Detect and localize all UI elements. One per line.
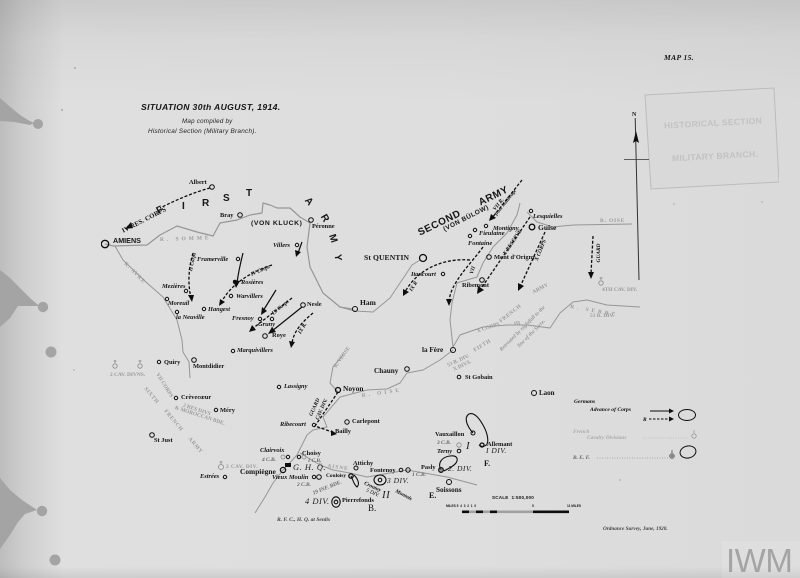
Sixth French Army labels: & MOROCCAN BDE. <box>174 405 226 427</box>
towns: First Army sector: la Neuville <box>176 314 205 321</box>
river names: R. SOMME <box>160 235 212 243</box>
towns: First Army sector: Rosières <box>240 279 264 286</box>
towns: First Army sector <box>101 179 335 480</box>
Fifth French Army labels: 53 R. DIV. <box>446 353 471 369</box>
river names: R. AVRE <box>123 261 147 285</box>
Sixth French Army labels: VII CORPS <box>154 372 174 399</box>
First Army label: S <box>223 193 230 204</box>
towns: First Army sector: Marquivillers <box>236 347 273 354</box>
B.E.F. and French unit labels: 1 C.B. <box>412 472 426 478</box>
Sixth French Army labels: FRENCH <box>162 409 184 433</box>
river names: R. SERRE <box>570 304 619 318</box>
towns: B.E.F. sector: II <box>381 489 391 501</box>
towns: B.E.F. sector: Noyon <box>343 384 364 393</box>
First Army label: R <box>202 198 210 209</box>
river names: R. VERSE <box>333 345 352 369</box>
towns: First Army sector: Estrées <box>199 473 220 480</box>
towns: B.E.F. sector: B. <box>368 503 376 513</box>
towns: First Army sector: Fresnoy <box>232 315 254 322</box>
German advance arrows: First Army: IX R. <box>297 322 308 336</box>
French cavalry symbols and labels: 2 CAV. DIVNS. <box>110 372 146 378</box>
towns: B.E.F. sector: 3 DIV. <box>386 476 409 485</box>
German advance arrows: First Army: IV Corps <box>249 264 271 278</box>
First Army label: I <box>182 201 185 212</box>
towns: B.E.F. sector: Croutoy <box>363 481 382 494</box>
towns: Second Army sector: St Gobain <box>465 374 493 381</box>
towns: First Army sector: Bray <box>220 212 234 219</box>
towns: Second Army sector: Mont d'Origny <box>494 254 536 261</box>
towns: Second Army sector: Laon <box>539 389 555 397</box>
towns: B.E.F. sector: E. <box>429 491 436 500</box>
north arrow: N <box>632 112 637 118</box>
German advance arrows: Second Army <box>403 180 602 306</box>
title block: SITUATION 30th AUGUST, 1914. <box>141 102 281 112</box>
towns: B.E.F. sector: Pasly <box>421 464 436 471</box>
towns: B.E.F. sector: Attichy <box>353 460 374 467</box>
towns: B.E.F. sector: Vauxaillon <box>435 431 465 438</box>
towns: B.E.F. sector: Choisy <box>302 450 322 457</box>
Fifth French Army labels: Retreated by nightfall to the <box>498 304 547 353</box>
Sixth French Army labels: SIXTH <box>143 386 160 405</box>
Fifth French Army labels: ARMY <box>532 282 549 295</box>
German advance arrows: Second Army: from Maubeuge <box>494 188 518 217</box>
stamp: Historical Section, Military Branch: MILITARY BRANCH. <box>672 149 758 163</box>
First Army label: (VON KLUCK) <box>251 220 303 227</box>
towns: First Army sector: Mezières <box>161 283 186 290</box>
towns: First Army sector: St Just <box>154 437 174 444</box>
scale bar <box>446 495 581 513</box>
towns: First Army sector: Moreuil <box>167 300 190 307</box>
towns: Second Army sector: Ham <box>360 298 377 307</box>
river names: R. OISE <box>361 387 402 399</box>
Second Army label: (VON BÜLOW) <box>441 202 490 233</box>
B.E.F. and French unit labels <box>261 440 461 496</box>
towns: First Army sector: Quiry <box>164 359 181 366</box>
German advance arrows: Second Army: VII <box>469 265 477 275</box>
towns: First Army sector: AMIENS <box>113 236 141 245</box>
towns: Second Army sector: Lesquielles <box>532 213 563 220</box>
legend: R <box>642 417 647 423</box>
B.E.F. corps positions outlines <box>332 414 488 507</box>
title block <box>141 102 281 135</box>
German advance arrows: Second Army: X RESERVE <box>502 228 524 257</box>
specks on paper <box>61 67 763 481</box>
B.E.F. and French unit labels: 3 C.B. <box>436 440 451 446</box>
towns: B.E.F. sector: I <box>465 440 471 452</box>
B.E.F. and French unit labels: 4 C.B. <box>261 457 276 463</box>
scale bar: 11 MILES <box>567 504 581 508</box>
German advance arrows: First Army: IV RES. CORPS <box>121 206 168 235</box>
scale bar: SCALE 1:500,000 <box>492 495 534 500</box>
legend: Advance of Corps <box>589 407 631 413</box>
towns: First Army sector: Villers <box>273 242 291 249</box>
First Army label: M <box>326 233 339 244</box>
Sixth French Army labels: ARMY <box>187 436 204 455</box>
B.E.F. and French unit labels: I C.B. <box>307 458 321 464</box>
stamp: Historical Section, Military Branch <box>645 88 779 189</box>
towns: B.E.F. sector: 2. DIV. <box>448 464 472 473</box>
map number: MAP 15. <box>663 53 694 62</box>
German advance arrows: Second Army: GUARD <box>596 243 602 262</box>
Second Army label: ARMY <box>477 184 510 208</box>
towns: B.E.F. sector <box>240 383 513 523</box>
towns: Second Army sector: Fontaine <box>468 240 492 247</box>
towns: Second Army sector: Montigny <box>492 225 519 232</box>
First Army label <box>155 188 343 262</box>
German advance arrows: First Army: II Corps <box>188 252 198 273</box>
river names: R. AISNE <box>318 462 349 472</box>
stamp: Historical Section, Military Branch: HISTORICAL SECTION <box>664 115 762 131</box>
legend: Cavalry Divisions <box>587 435 626 441</box>
scale bar: MILES 5 4 3 2 1 0 <box>446 504 476 508</box>
towns: Second Army sector: Ribemont <box>462 282 490 289</box>
towns: B.E.F. sector: Couloisy <box>326 473 346 479</box>
Sixth French Army labels: 2 RES DIVS <box>182 403 211 417</box>
legend <box>572 399 697 461</box>
Guard cavalry advance near Noyon <box>308 392 338 436</box>
Second Army label: SECOND <box>416 208 463 238</box>
Fifth French Army labels: FRENCH <box>498 303 523 324</box>
towns: Second Army sector: St QUENTIN <box>364 253 410 262</box>
towns: B.E.F. sector: Terny <box>437 448 452 455</box>
German advance arrows: Second Army: X CORPS <box>534 239 548 263</box>
Fifth French Army labels: FIFTH <box>473 338 493 354</box>
towns: Second Army sector: la Fère <box>422 346 443 354</box>
towns: First Army sector: Crèvecœur <box>181 394 211 401</box>
scale bar: 5 <box>532 504 534 508</box>
towns: B.E.F. sector: Carlepont <box>352 418 381 425</box>
publisher credit: Ordnance Survey, June, 1920. <box>603 526 668 532</box>
First Army label: T <box>246 188 252 199</box>
First Army label: R <box>318 213 331 225</box>
First Army label: Y <box>332 254 343 262</box>
First Army label: A <box>302 195 315 208</box>
north arrow <box>624 112 649 280</box>
German advance arrows: Second Army: VII R. <box>492 197 505 212</box>
towns: B.E.F. sector: F. <box>484 459 490 468</box>
legend: French <box>573 429 589 435</box>
French cavalry symbols and labels: 51 R. DIV. <box>590 313 615 319</box>
legend: Germans <box>574 399 595 405</box>
Guard cavalry advance near Noyon: CAV. DIV. <box>315 398 329 421</box>
Sixth French Army labels <box>143 372 226 455</box>
Fifth French Army labels: X DIVS. <box>452 359 473 373</box>
French cavalry symbols and labels: 4TH CAV. DIV. <box>602 287 638 293</box>
towns: First Army sector: Nesle <box>307 301 322 308</box>
French cavalry symbols and labels <box>110 277 638 470</box>
towns: First Army sector: Framerville <box>197 256 228 263</box>
towns: B.E.F. sector: Lassigny <box>283 383 308 390</box>
towns: First Army sector: Roye <box>272 332 286 339</box>
towns: B.E.F. sector: Allemant <box>487 441 513 448</box>
towns: First Army sector: Montdidier <box>193 363 224 370</box>
Fifth French Army labels: line of the Serre. <box>516 318 547 349</box>
towns: First Army sector: Warvillers <box>236 293 263 300</box>
river names <box>123 218 625 472</box>
towns: B.E.F. sector: Clairvoix <box>260 447 285 454</box>
towns: B.E.F. sector: 4 DIV. <box>305 496 330 506</box>
towns: First Army sector: Albert <box>189 179 208 186</box>
First Army label: F <box>155 204 165 217</box>
title block: Historical Section (Military Branch). <box>148 128 257 135</box>
towns: First Army sector: Gruny <box>258 321 275 328</box>
towns: Second Army sector: Guise <box>538 223 557 232</box>
French cavalry symbols and labels: 2 CAV. DIV. <box>226 464 258 470</box>
Second Army label <box>416 184 510 238</box>
towns: Second Army sector <box>352 209 563 397</box>
title block: Map compiled by <box>182 118 233 125</box>
legend: B. E. F. <box>572 455 590 461</box>
Fifth French Army labels: X CORPS <box>476 321 500 334</box>
towns: B.E.F. sector: 5 DIV. <box>365 487 380 499</box>
Guard cavalry advance near Noyon: GUARD <box>308 397 322 417</box>
towns: Second Army sector: Itancourt <box>410 271 436 278</box>
towns: B.E.F. sector: Ribecourt <box>279 421 306 428</box>
towns: First Army sector: Méry <box>220 407 236 414</box>
Fifth French Army labels: III <box>514 320 521 328</box>
towns: B.E.F. sector: Fontenoy <box>370 467 396 474</box>
river names: R. OISE <box>600 218 625 224</box>
towns: Second Army sector: Chauny <box>374 367 399 375</box>
German advance arrows: First Army <box>121 188 313 348</box>
map drawing <box>101 53 779 532</box>
Fifth French Army labels <box>446 282 549 373</box>
torn edges and punched holes at left margin <box>0 98 60 566</box>
German advance arrows: Second Army: IX R <box>408 280 419 293</box>
towns: B.E.F. sector: Pierrefonds <box>342 497 374 504</box>
rivers <box>105 203 640 513</box>
B.E.F. and French unit labels: 2 C.B. <box>296 482 311 488</box>
IWM watermark: IWM <box>726 542 792 578</box>
towns: First Army sector: Péronne <box>312 223 335 230</box>
towns: B.E.F. sector: G. H. Q. <box>293 462 326 472</box>
towns: B.E.F. sector: Vieux Moulin <box>272 474 309 481</box>
German advance arrows: First Army: IX Corps <box>270 299 290 317</box>
towns: First Army sector: Hangest <box>207 306 230 313</box>
towns: B.E.F. sector: Bailly <box>335 428 352 435</box>
B.E.F. and French unit labels: 19 INF. BDE. <box>312 479 343 496</box>
towns: B.E.F. sector: I DIV. <box>485 446 507 455</box>
towns: B.E.F. sector: Compiègne <box>240 467 276 476</box>
towns: B.E.F. sector: Soissons <box>436 486 462 494</box>
towns: B.E.F. sector: R. F. C., H. Q. at Senlis <box>276 517 330 523</box>
towns: Second Army sector: Fieulaine <box>479 230 505 237</box>
towns: B.E.F. sector: Montois <box>393 488 413 502</box>
